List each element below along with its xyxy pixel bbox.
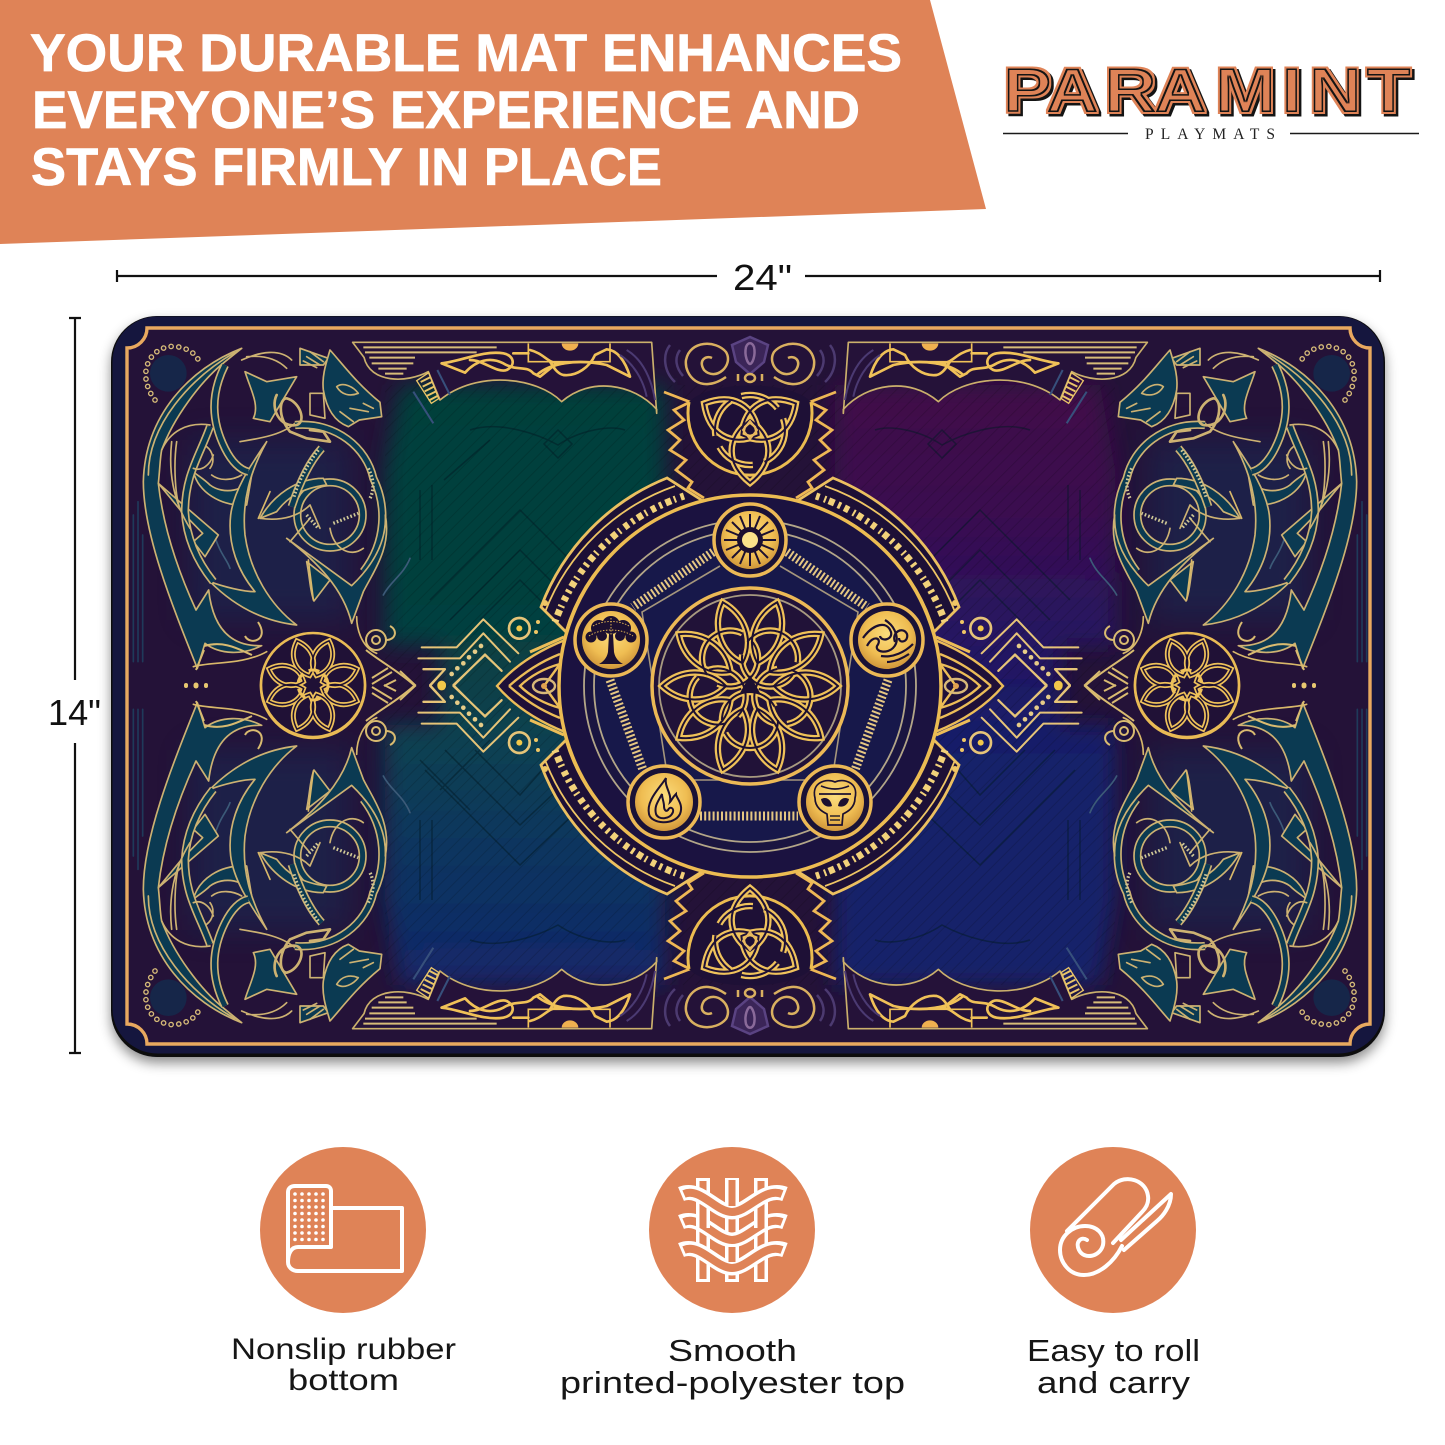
width dimension <box>117 257 1380 298</box>
heading line 1: YOUR DURABLE MAT ENHANCES <box>30 24 902 83</box>
height dimension <box>48 318 101 1053</box>
width label: 24" <box>733 257 792 298</box>
air element <box>851 604 923 676</box>
brand logo <box>1003 56 1419 143</box>
dragon and frame top-right <box>843 342 1367 738</box>
feature: easy to roll <box>1027 1147 1200 1400</box>
caption line 1: Smooth <box>668 1333 797 1368</box>
mat base <box>111 316 1385 1057</box>
inner ground <box>127 328 1370 1044</box>
panel glow left <box>385 385 665 985</box>
heading line 2: EVERYONE’S EXPERIENCE AND <box>32 81 860 140</box>
icon: woven fabric <box>681 1178 785 1282</box>
sun element <box>714 504 786 576</box>
playmat <box>111 316 1385 1057</box>
panel hatch <box>385 385 1115 985</box>
zigzag links <box>610 552 888 816</box>
logo rule right <box>1290 132 1419 134</box>
rune band bottom-left <box>534 738 703 894</box>
height label: 14" <box>48 692 101 733</box>
top trefoil ornament <box>664 337 836 498</box>
bottom trefoil ornament <box>664 873 836 1034</box>
right lower glow <box>1150 750 1310 930</box>
heading line 3: STAYS FIRMLY IN PLACE <box>31 138 662 197</box>
dragon and frame bottom-left <box>133 633 657 1029</box>
logo wordmark: PARAMINT <box>1003 56 1411 126</box>
rune band top-left <box>534 478 703 634</box>
dragon and frame bottom-right <box>843 633 1367 1029</box>
logo rule left <box>1003 132 1128 134</box>
central disc <box>559 495 941 877</box>
icon: rolled mat with dots <box>288 1186 402 1271</box>
gold border <box>127 328 1370 1044</box>
tree element <box>575 604 647 676</box>
feature: nonslip rubber bottom <box>231 1147 456 1397</box>
skull element <box>799 766 871 838</box>
panel glow right <box>835 385 1115 985</box>
left lower glow <box>190 750 350 930</box>
rune band bottom-right <box>797 738 966 894</box>
dragon and frame top-left <box>133 342 657 738</box>
fire element <box>628 766 700 838</box>
caption line 1: Easy to roll <box>1027 1333 1200 1368</box>
right upper glow <box>1150 440 1310 620</box>
icon circle <box>649 1147 815 1313</box>
icon circle <box>260 1147 426 1313</box>
caption line 2: and carry <box>1037 1365 1191 1400</box>
left upper glow <box>190 440 350 620</box>
right eye ornament <box>935 637 1003 735</box>
caption line 2: bottom <box>288 1364 399 1397</box>
left eye ornament <box>497 637 565 735</box>
panel pattern <box>420 427 1080 943</box>
icon: rolled mat <box>1060 1179 1171 1275</box>
caption line 1: Nonslip rubber <box>231 1333 456 1366</box>
caption line 2: printed-polyester top <box>560 1365 905 1400</box>
rune band top-right <box>797 478 966 634</box>
icon circle <box>1030 1147 1196 1313</box>
feature: smooth polyester top <box>560 1147 905 1400</box>
pentagon inner lines <box>642 566 858 780</box>
header banner <box>0 0 986 244</box>
mat surface <box>112 316 1384 1054</box>
logo subtitle: PLAYMATS <box>1145 126 1275 143</box>
center knot medallion <box>652 588 848 784</box>
